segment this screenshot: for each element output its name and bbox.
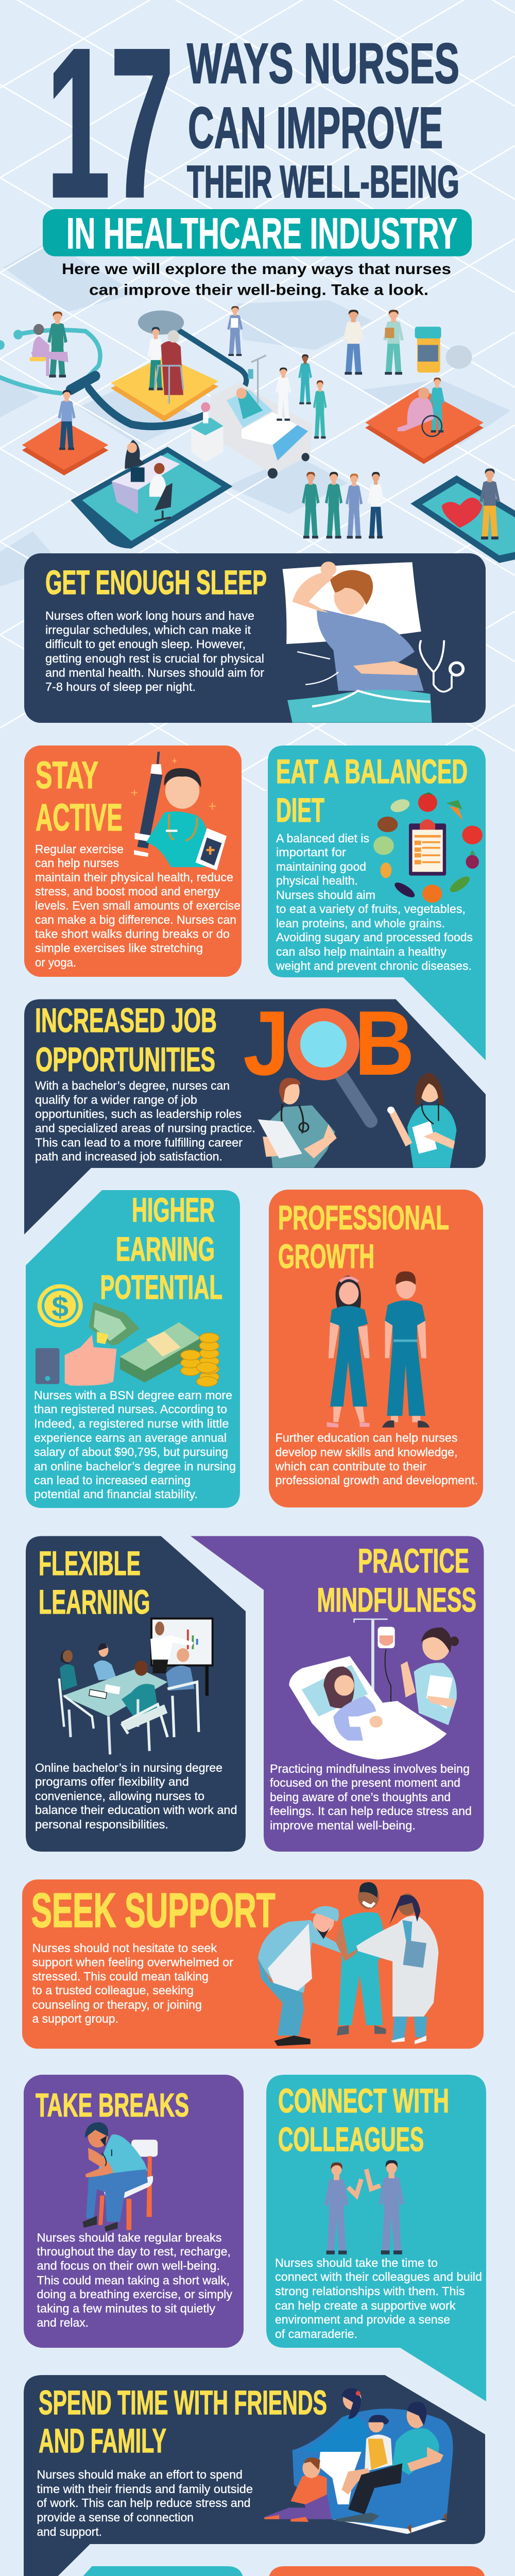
bottom team [302,472,319,538]
icon: two nurses standing [327,1272,430,1428]
text block: take short walks during breaks or do [35,927,230,941]
text block: can also help maintain a healthy [276,945,447,958]
panel: attend professional development events [268,2566,486,2576]
heading [276,752,468,829]
heading: TAKE BREAKS [36,2087,189,2124]
text block: 7-8 hours of sleep per night. [45,680,196,693]
text block: and focus on their own well-being. [37,2259,220,2273]
heading [278,2081,449,2158]
icon: three medical staff [258,1882,438,2046]
text block: feelings. It can help reduce stress and [270,1804,472,1818]
text block [37,2468,253,2538]
text block: physical health. [276,874,358,887]
intro text [62,261,451,299]
text block [32,1941,233,2025]
text block [45,609,264,693]
text block: and support. [37,2525,102,2538]
heading: GET ENOUGH SLEEP [45,563,267,601]
text block: being aware of one’s thoughts and [270,1790,451,1804]
text block: programs offer flexibility and [35,1775,189,1788]
text block [35,842,241,969]
text block: and specialized areas of nursing practice. [35,1121,255,1134]
big word JOB with magnifier: JOB [243,992,415,1094]
text block: Nurses should take regular breaks [37,2231,221,2244]
text block: stressed. This could mean talking [32,1970,209,1983]
heading: COLLEAGUES [278,2120,424,2158]
icon: family on couch [263,2388,453,2534]
text block: can help nurses [35,856,119,870]
heading: SPEND TIME WITH FRIENDS [39,2383,327,2421]
icon: nurse with patient in bed [289,1619,459,1759]
panel: practice mindfulness [191,1536,484,1852]
heading [39,1544,150,1621]
text block: getting enough rest is crucial for physical [45,652,264,665]
text block [35,1079,255,1163]
text block: Indeed, a registered nurse with little [34,1417,229,1430]
text block [37,2231,232,2329]
text block: opportunities, such as leadership roles [35,1107,242,1121]
text block: develop new skills and knowledge, [275,1446,457,1459]
text block: Online bachelor’s in nursing degree [35,1761,222,1774]
text block: or yoga. [35,956,76,969]
text block [270,1762,472,1832]
title [46,5,459,242]
icon: nurse with syringe [131,752,227,870]
text block: taking a few minutes to sit quietly [37,2302,216,2315]
text block: strong relationships with them. This [275,2284,465,2298]
text block: maintaining good [276,860,366,873]
heading: HIGHER [132,1191,215,1229]
text block: than registered nurses. According to [34,1402,227,1416]
text block: Nurses should take the time to [275,2256,438,2269]
panel: stay active [24,745,242,977]
wheelchair nurse [430,378,444,432]
text block: a support group. [32,2012,118,2025]
text block: Nurses should aim [276,888,375,902]
heading [100,1191,222,1306]
panel: professional growth [269,1190,483,1507]
text block: experience earns an average annual [34,1431,227,1445]
heading [278,1198,449,1275]
text block: Nurses with a BSN degree earn more [34,1388,232,1402]
text block: weight and prevent chronic diseases. [276,959,472,973]
IV pole [251,355,266,403]
text block: important for [276,845,346,859]
text block: improve mental well-being. [270,1819,416,1832]
text block: levels. Even small amounts of exercise [35,899,241,912]
heading: FLEXIBLE [39,1544,141,1582]
heading [35,1001,217,1078]
text block: which can contribute to their [274,1460,426,1473]
heading: GROWTH [278,1237,374,1275]
text block: Practicing mindfulness involves being [270,1762,470,1775]
text block [34,1388,236,1501]
heading: ACTIVE [36,796,123,839]
text block: Regular exercise [35,842,124,856]
text block [35,1761,237,1831]
heading: LEARNING [39,1583,150,1621]
text block: connect with their colleagues and build [275,2270,482,2283]
text block: can help create a supportive work [275,2299,456,2312]
icon: sleeping nurse [283,562,463,723]
panel: get enough sleep [24,553,486,723]
panel: increased job opportunities [24,992,486,1234]
heading [36,754,123,839]
pill bottle [417,328,440,372]
text block: can lead to increased earning [34,1473,191,1487]
text block: can make a big difference. Nurses can [35,913,236,926]
panel: seek support [22,1879,484,2048]
text block: path and increased job satisfaction. [35,1150,222,1163]
stethoscope [0,329,246,427]
text block: lean proteins, and whole grains. [276,917,445,930]
text block: time with their friends and family outside [37,2482,253,2496]
heading: POTENTIAL [100,1268,222,1306]
nightstand [191,417,224,462]
text block: Avoiding sugary and processed foods [276,930,473,944]
platforms [111,362,218,421]
intro text: can improve their well-being. Take a look. [89,281,428,299]
text block [276,832,473,973]
text block: focused on the present moment and [270,1776,460,1789]
bed [210,382,312,474]
text block: With a bachelor’s degree, nurses can [35,1079,230,1092]
text block: throughout the day to rest, recharge, [37,2245,231,2258]
text block: A balanced diet is [276,832,369,845]
icon: two nurses [258,1073,457,1168]
heading: OPPORTUNITIES [36,1040,215,1078]
text block: This can lead to a more fulfilling career [35,1136,243,1149]
text block: convenience, allowing nurses to [35,1789,204,1803]
heading: AND FAMILY [39,2421,166,2460]
text block: Further education can help nurses [275,1431,457,1445]
panel: spend time with friends and family [24,2375,485,2576]
icon: tired nurse on chair [83,2122,158,2232]
text block [275,2256,482,2341]
text block: simple exercises like stretching [35,941,203,955]
icon: two colleagues [324,2160,404,2255]
heading: SEEK SUPPORT [31,1883,276,1937]
heading [317,1541,476,1619]
text block [274,1431,478,1487]
big number 17: 17 [46,5,174,242]
text block: to eat a variety of fruits, vegetables, [276,902,466,916]
people [47,312,67,378]
text block: Nurses should not hesitate to seek [32,1941,217,1955]
text block: environment and provide a sense [275,2313,450,2326]
tablets [71,447,233,549]
heading: STAY [36,754,98,796]
heading: INCREASED JOB [35,1001,217,1039]
text block: and relax. [37,2316,89,2329]
text block: salary of about $90,795, but pursuing [34,1445,228,1459]
text block: balance their education with work and [35,1803,237,1817]
icon: money and coins [36,1284,219,1386]
text block: of camaraderie. [275,2327,357,2341]
text block: doing a breathing exercise, or simply [37,2287,232,2301]
icon: classroom meeting [59,1619,213,1754]
text block: to a trusted colleague, seeking [32,1984,194,1997]
panel: connect with colleagues [266,2075,486,2401]
icon: diet plan and vegetables [373,792,483,903]
text block: and mental health. Nurses should aim for [45,666,264,680]
heading: DIET [276,791,324,829]
text block: stress, and boost mood and energy [35,885,220,898]
text block: an online bachelor’s degree in nursing [34,1460,236,1473]
panel: flexible learning [26,1536,246,1852]
heading: EARNING [116,1230,215,1268]
icon: money and coins: $ [52,1291,68,1323]
desk scene [112,455,180,514]
panel: take breaks [24,2075,244,2348]
text block: personal responsibilities. [35,1818,168,1831]
hero illustration [0,306,515,563]
text block: irregular schedules, which can make it [45,623,251,637]
text block: provide a sense of connection [37,2511,194,2524]
text block: difficult to get enough sleep. However, [45,637,246,651]
text block: of work. This can help reduce stress and [37,2496,250,2510]
text block: maintain their physical health, reduce [35,871,233,884]
text block: support when feeling overwhelmed or [32,1956,233,1969]
text block: qualify for a wider range of job [35,1093,197,1106]
text block: counseling or therapy, or joining [32,1998,202,2011]
text block: Nurses often work long hours and have [45,609,254,622]
panel: join a professional organization [24,2566,244,2576]
text block: potential and financial stability. [34,1487,198,1501]
text block: professional growth and development. [275,1473,478,1487]
panel: eat a balanced diet [268,745,486,1060]
text block: Nurses should make an effort to spend [37,2468,243,2481]
panel: higher earning potential [26,1190,240,1508]
text block: This could mean taking a short walk, [37,2274,230,2287]
intro text: Here we will explore the many ways that nurses [62,261,451,278]
heart [442,498,482,528]
heading [39,2383,327,2460]
